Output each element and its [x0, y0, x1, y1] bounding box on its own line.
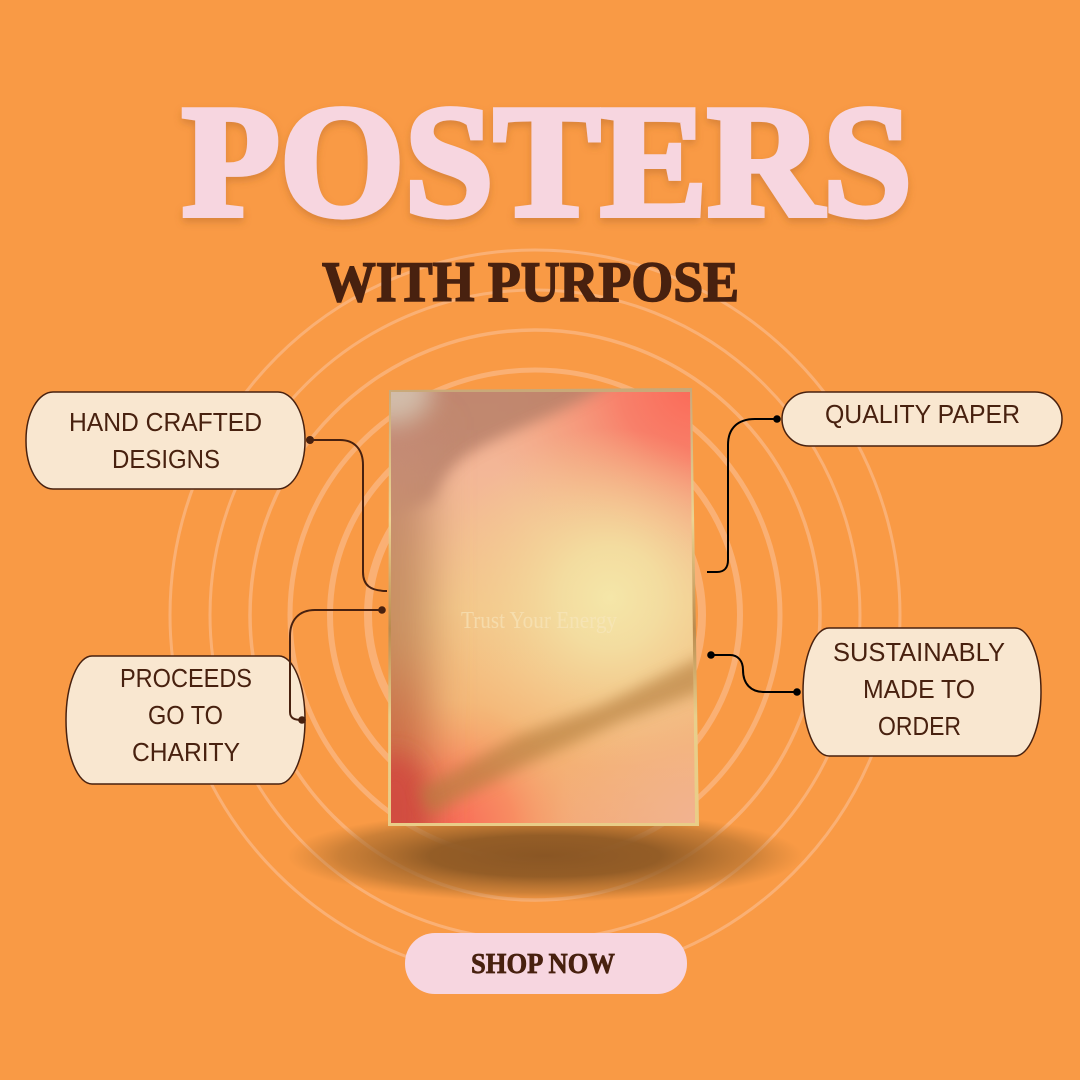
poster artwork	[391, 392, 695, 823]
subtitle: WITH PURPOSE: WITH PURPOSE	[322, 251, 739, 314]
connector: quality paper	[707, 415, 781, 572]
button: shop now: SHOP NOW	[471, 949, 615, 980]
callout: proceeds go to charity: GO TO	[148, 702, 223, 730]
connector: proceeds go to charity	[290, 606, 386, 724]
callout: hand crafted designs	[26, 392, 305, 489]
callout: quality paper	[782, 392, 1062, 446]
top left highlight	[391, 392, 442, 434]
poster caption: Trust Your Energy	[461, 608, 617, 634]
poster frame	[388, 388, 699, 826]
callout: hand crafted designs: DESIGNS	[112, 446, 220, 474]
callout: hand crafted designs: HAND CRAFTED	[69, 409, 262, 437]
window shadow: lower band	[418, 655, 705, 815]
callout: quality paper: QUALITY PAPER	[825, 401, 1020, 429]
callout: proceeds go to charity	[66, 656, 305, 784]
callout: proceeds go to charity: CHARITY	[132, 739, 240, 767]
poster ground shadow	[287, 810, 803, 902]
connector: hand crafted designs	[306, 436, 387, 591]
button: shop now	[405, 933, 687, 994]
window shadow: left side	[391, 487, 452, 823]
poster mockup	[388, 388, 699, 826]
callout: sustainably made to order	[803, 628, 1041, 756]
callout: sustainably made to order: MADE TO	[863, 676, 975, 704]
callout: proceeds go to charity: PROCEEDS	[120, 665, 252, 693]
callout: sustainably made to order: SUSTAINABLY	[833, 639, 1005, 667]
window shadow: upper band	[391, 392, 608, 504]
title: POSTERS: POSTERS	[182, 72, 912, 250]
callout: sustainably made to order: ORDER	[878, 713, 961, 741]
bottom left red	[391, 750, 433, 823]
connector: sustainably made to order	[707, 651, 801, 696]
concentric rings	[170, 250, 900, 980]
